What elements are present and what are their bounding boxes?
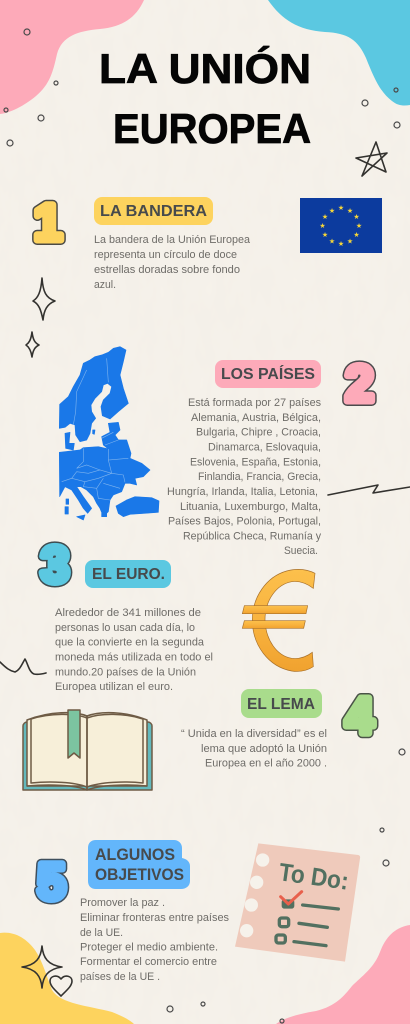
icon: open book [23, 710, 152, 790]
icon: EU flag: ★ [338, 240, 344, 248]
title: EUROPEA [113, 105, 311, 152]
icon: sketched star [356, 142, 387, 176]
number 4: 4 [345, 687, 374, 744]
title [99, 44, 311, 152]
number 5: 5 [37, 853, 66, 910]
icon: sparkle small [26, 332, 39, 357]
icon: to-do note: To Do: [277, 858, 350, 896]
text block: personas lo usan cada día, lo [55, 622, 195, 634]
text block [80, 897, 229, 983]
icon: EU flag: ★ [329, 207, 335, 215]
text block: azul. [94, 279, 116, 291]
blob: top left pink [0, 0, 144, 114]
number 1: 1 [34, 194, 62, 251]
text block: representa un círculo de doce [94, 249, 237, 261]
section 2: los países [59, 347, 374, 557]
blob: bottom right pink [276, 925, 410, 1024]
blob: bottom left yellow [0, 933, 134, 1024]
text block [181, 728, 327, 770]
text block: que la convierte en la segunda [55, 637, 205, 649]
text block: Está formada por 27 países [188, 397, 321, 409]
text block: Europea en el año 2000 . [205, 758, 327, 770]
icon: EU flag: ★ [347, 238, 353, 246]
number 2: 2 [345, 355, 374, 412]
heading label [88, 840, 190, 889]
text block: “ Unida en la diversidad” es el [181, 728, 327, 740]
text block [55, 607, 213, 693]
text block: Lituania, Luxemburgo, Malta, [180, 501, 321, 513]
section 3: el euro [41, 536, 315, 693]
text block: lema que adoptó la Unión [201, 743, 327, 755]
text block: Suecia. [284, 545, 318, 557]
text block: Países Bajos, Polonia, Portugal, [168, 516, 321, 528]
icon: EU flag: ★ [353, 213, 360, 221]
text block: Promover la paz . [80, 897, 165, 909]
heading label [215, 360, 321, 388]
section 5: algunos objetivos [37, 840, 360, 983]
heading label [241, 689, 322, 718]
icon: to-do note [235, 843, 360, 962]
icon: EU flag: ★ [329, 238, 335, 246]
text block: mundo.20 países de la Unión [55, 666, 196, 678]
heading label: EL LEMA [247, 696, 315, 713]
text block: de la UE. [80, 927, 123, 939]
icon: euro symbol [242, 569, 315, 671]
section 1: la bandera [34, 194, 382, 291]
icon: bottom sparkle and heart [22, 946, 72, 996]
heading label: LOS PAÍSES [221, 364, 315, 383]
number 4: 4 [345, 687, 374, 744]
number 2: 2 [345, 355, 374, 412]
icon: EU flag [300, 198, 382, 253]
text block: países de la UE . [80, 971, 160, 983]
text block: La bandera de la Unión Europea [94, 234, 251, 246]
icon: EU flag: ★ [322, 231, 328, 239]
heading label: OBJETIVOS [95, 865, 184, 884]
text block: moneda más utilizada en todo el [55, 652, 213, 664]
text block: Eliminar fronteras entre países [80, 912, 229, 924]
text block [167, 397, 321, 557]
text block: Proteger el medio ambiente. [80, 942, 218, 954]
icon: EU flag: ★ [347, 207, 353, 215]
section 4: el lema [23, 687, 374, 790]
map of Europe [59, 347, 159, 520]
doodle: zigzag line [328, 485, 410, 495]
heading label: ALGUNOS [95, 845, 175, 864]
number 5: 5 [37, 853, 66, 910]
heading label [85, 560, 171, 588]
text block: Finlandia, Francia, Grecia, [198, 471, 321, 483]
text block: estrellas doradas sobre fondo [94, 264, 240, 276]
text block: República Checa, Rumanía y [183, 530, 321, 542]
text block: Formentar el comercio entre [80, 956, 217, 968]
number 3: 3 [41, 536, 69, 593]
icon: EU flag: ★ [322, 213, 328, 221]
text block: Alrededor de 341 millones de [55, 607, 201, 619]
icon: sparkle large [33, 278, 55, 320]
number 1: 1 [34, 194, 62, 251]
icon: EU flag: ★ [353, 231, 360, 239]
text block: Bulgaria, Chipre , Croacia, [196, 427, 321, 439]
heading label: LA BANDERA [100, 203, 207, 220]
blob: top right blue [268, 0, 410, 106]
text block: Eslovenia, España, Estonia, [190, 456, 321, 468]
heading label: EL EURO. [92, 566, 165, 583]
icon: EU flag: ★ [356, 222, 362, 230]
doodle: squiggle [0, 659, 46, 674]
heading label [94, 197, 213, 225]
title: LA UNIÓN [99, 44, 311, 92]
text block [94, 234, 251, 291]
number 3: 3 [41, 536, 69, 593]
text block: Hungría, Irlanda, Italia, Letonia, [167, 486, 318, 498]
icon: EU flag: ★ [338, 204, 344, 212]
text block: Dinamarca, Eslovaquia, [208, 442, 321, 454]
text block: Alemania, Austria, Bélgica, [191, 412, 321, 424]
icon: EU flag: ★ [319, 222, 326, 230]
text block: Europea utilizan el euro. [55, 681, 173, 693]
